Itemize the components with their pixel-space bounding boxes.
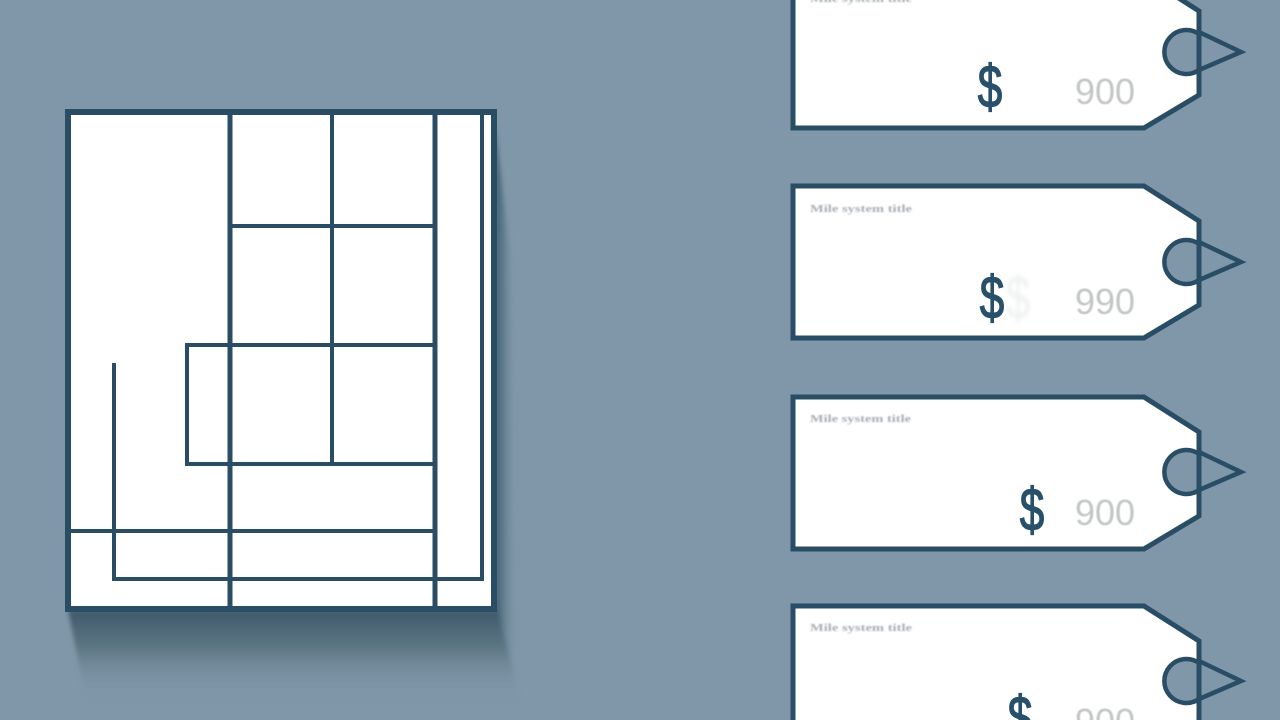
floor plan <box>68 112 520 700</box>
plan walls <box>68 112 483 608</box>
dollar sign: $ <box>978 53 1002 121</box>
tag hole and string <box>1164 432 1241 516</box>
plan sheet <box>68 112 494 609</box>
price tag 4 <box>793 606 1241 720</box>
tag caption: Mile system title <box>810 623 912 634</box>
tag outline <box>793 397 1199 549</box>
price: 900 <box>1075 492 1135 533</box>
tag outline <box>793 606 1199 720</box>
tag hole and string <box>1164 221 1241 305</box>
tag hole and string <box>1164 641 1241 720</box>
tag outline <box>793 186 1199 338</box>
tag caption: Mile system title <box>810 414 911 425</box>
dollar sign: $ <box>1020 476 1044 544</box>
faint dollar ghost: $ <box>1006 264 1030 332</box>
tag outline <box>793 0 1199 128</box>
plan drop shadow <box>68 125 520 700</box>
price tag 2 <box>793 186 1241 338</box>
price: 900 <box>1075 71 1135 112</box>
price tag 1 <box>793 0 1241 128</box>
price: 990 <box>1075 281 1135 322</box>
tag hole and string <box>1164 11 1241 95</box>
dollar sign: $ <box>980 264 1004 332</box>
price tag 3 <box>793 397 1241 549</box>
tag caption: Mile system title <box>810 204 912 215</box>
